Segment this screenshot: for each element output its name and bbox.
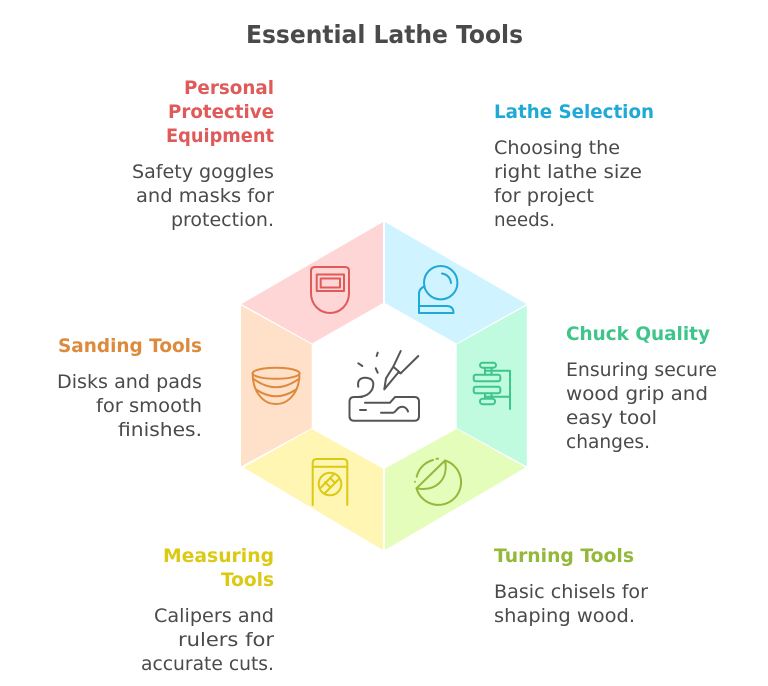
heading: Turning Tools (494, 545, 634, 567)
heading: Sanding Tools (58, 335, 202, 357)
description (566, 359, 717, 453)
icon: chuck (474, 363, 510, 409)
segment: personal protective equipment (242, 222, 383, 344)
text block: sanding tools (57, 335, 202, 441)
description: and masks for (136, 185, 274, 207)
description: finishes. (118, 419, 202, 441)
title: Essential Lathe Tools (246, 20, 523, 49)
description (494, 137, 642, 231)
description: rulers for (178, 629, 274, 651)
description: easy tool (566, 407, 657, 429)
segment: lathe selection (385, 222, 526, 344)
segment: sanding tools (241, 306, 312, 466)
icon: welding mask (311, 267, 349, 313)
heading: Lathe Selection (494, 101, 654, 123)
description: wood grip and (566, 383, 708, 405)
description: for smooth (96, 395, 202, 417)
description: needs. (494, 209, 555, 231)
text block: turning tools (494, 545, 648, 627)
text block: lathe selection (494, 101, 654, 231)
description: protection. (171, 209, 274, 231)
heading: Tools (221, 569, 274, 591)
heading (166, 77, 274, 147)
heading: Chuck Quality (566, 323, 711, 345)
description: Basic chisels for (494, 581, 648, 603)
description: accurate cuts. (141, 653, 274, 675)
heading: Personal (184, 77, 274, 99)
description: Calipers and (154, 605, 274, 627)
segment: chuck quality (457, 306, 527, 466)
description (494, 581, 648, 627)
heading: Equipment (166, 125, 274, 147)
description (57, 371, 202, 441)
heading: Protective (168, 101, 274, 123)
description (132, 161, 274, 231)
description: changes. (566, 431, 650, 453)
text block: measuring tools (141, 545, 274, 675)
text block: personal protective equipment (132, 77, 274, 231)
description: Safety goggles (132, 161, 274, 183)
description: Choosing the (494, 137, 620, 159)
segment: turning tools (385, 429, 526, 550)
icon: sanding bowl (252, 368, 300, 404)
description: for project (494, 185, 594, 207)
icon: turning tool (415, 459, 461, 505)
description: right lathe size (494, 161, 642, 183)
segment: measuring tools (244, 429, 383, 550)
icon: lathe (419, 266, 457, 313)
icon: caliper (313, 459, 347, 505)
heading: Measuring (163, 545, 274, 567)
panel: hexagon diagram (241, 222, 527, 550)
description (141, 605, 274, 675)
description: shaping wood. (494, 605, 635, 627)
icon: central lathe work (350, 351, 419, 421)
text block: chuck quality (566, 323, 717, 453)
description: Ensuring secure (566, 359, 717, 381)
description: Disks and pads (57, 371, 202, 393)
heading (163, 545, 274, 591)
